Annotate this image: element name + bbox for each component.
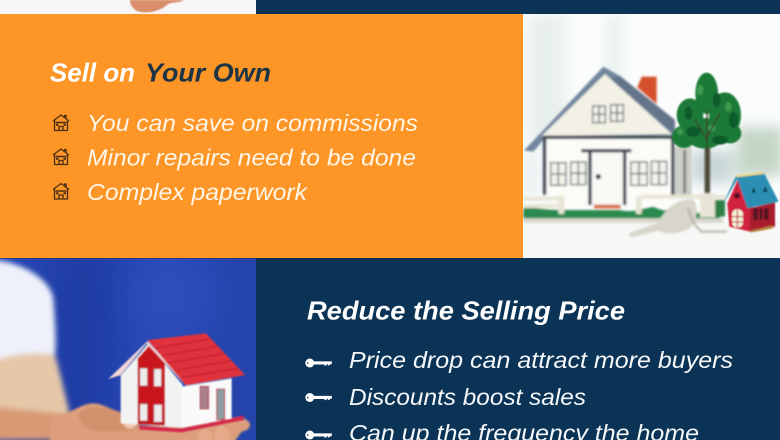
grass <box>523 207 720 218</box>
icon: house bullet 2 <box>53 149 69 164</box>
roof <box>108 341 186 386</box>
text: minor repairs: Minor repairs need to be done <box>87 144 416 170</box>
key <box>628 199 727 237</box>
heading: sell on your own: Sell on <box>50 58 135 88</box>
panel: sell on your own <box>0 14 523 258</box>
arm <box>0 353 70 415</box>
text: price drop: Price drop can attract more buyers <box>349 347 734 373</box>
panel: reduce the selling price <box>305 296 734 440</box>
sleeve <box>0 260 56 362</box>
palm <box>50 403 250 440</box>
house base <box>139 416 244 432</box>
heading: sell on your own: Your Own <box>145 58 271 88</box>
heading: reduce the selling price: Reduce the Selling Price <box>307 296 625 326</box>
photo: hand holding red-roofed model house <box>0 252 260 440</box>
icon: house bullet 3 <box>53 184 69 199</box>
icon: house bullet 1 <box>53 115 69 130</box>
icon: key bullet 1 <box>305 358 332 368</box>
tree trunk <box>705 147 710 193</box>
walls <box>543 136 674 205</box>
gable <box>542 74 672 136</box>
small red house <box>722 172 779 233</box>
icon: key bullet 3 <box>305 430 332 440</box>
list: reduce the selling price points <box>305 347 734 440</box>
tree foliage <box>672 73 741 150</box>
house walls <box>121 343 183 428</box>
photo strip: hand on white shirt <box>0 0 256 14</box>
roof <box>524 67 675 152</box>
text: complex paperwork: Complex paperwork <box>87 179 309 205</box>
list: sell on your own points <box>53 110 419 205</box>
photo: model house with tree and keys <box>520 13 780 260</box>
upper windows <box>551 105 667 185</box>
icon: key bullet 2 <box>305 393 332 402</box>
side wall <box>673 147 692 197</box>
table <box>523 220 780 258</box>
fence <box>523 193 727 217</box>
text: save on commissions: You can save on commissions <box>87 110 419 136</box>
chimney <box>637 77 657 104</box>
text: discounts: Discounts boost sales <box>349 384 587 410</box>
windows <box>140 368 162 422</box>
door <box>591 152 623 205</box>
